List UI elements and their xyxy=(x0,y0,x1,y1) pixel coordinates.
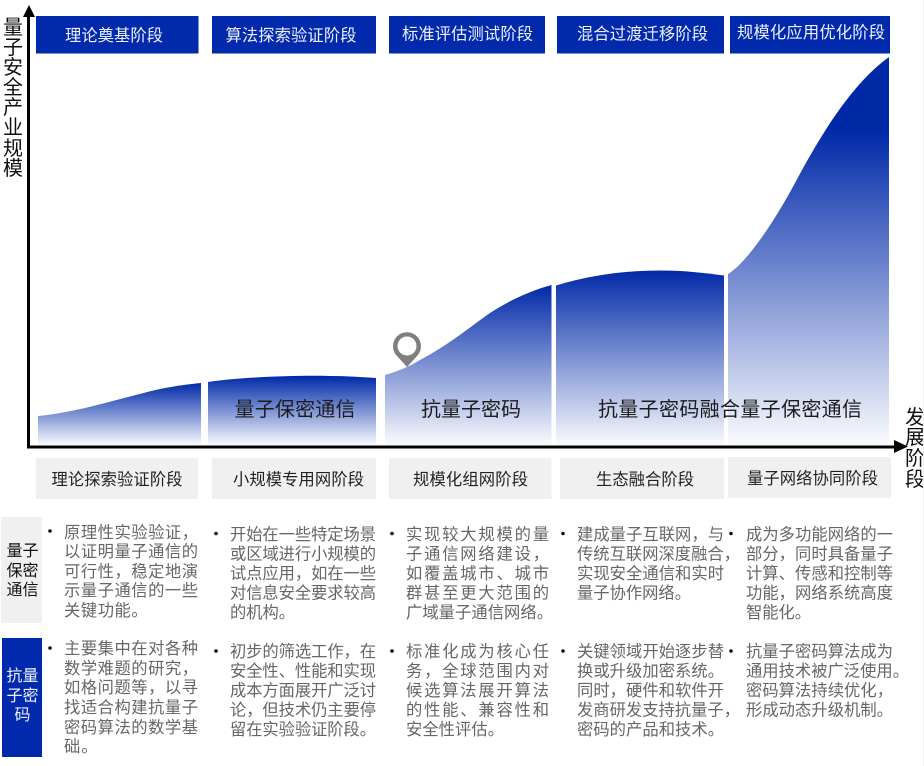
area chart: growth curve xyxy=(38,57,889,445)
chart label: quantum key communication: 量子保密通信 xyxy=(234,398,356,421)
text block: row 1 column 3: 子通信网络建设， xyxy=(406,544,549,564)
text block: row 2 column 1: 数学难题的研究， xyxy=(64,660,198,678)
text block: row 1 column 3: 实现较大规模的量 xyxy=(406,526,549,544)
y axis title: 规 xyxy=(3,137,23,160)
text block: row 1 column 1 xyxy=(48,524,198,620)
text block: row 1 column 5 xyxy=(729,525,893,622)
text block: row 2 column 4: 同时，硬件和软件开 xyxy=(577,682,724,700)
y axis title: 模 xyxy=(3,157,23,180)
y axis title: 产 xyxy=(3,96,23,119)
text block: row 1 column 3: 广域量子通信网络。 xyxy=(406,603,553,622)
text block: row 1 column 3: 如覆盖城市、城市 xyxy=(406,565,549,583)
y axis title: 子 xyxy=(3,37,23,59)
text block: row 1 column 1: 可行性，稳定地演 xyxy=(64,563,198,581)
text block: row 1 column 2: 试点应用，如在一些 xyxy=(230,564,376,583)
stage label 3: 规模化组网阶段 xyxy=(413,471,528,489)
text block: row 2 column 2: 成本方面展开广泛讨 xyxy=(230,682,376,700)
y axis title: 全 xyxy=(3,76,23,99)
stage label 1: 理论探索验证阶段 xyxy=(52,471,182,489)
text block: row 1 column 5: 智能化。 xyxy=(746,604,811,622)
text block: row 2 column 2 xyxy=(214,642,376,739)
chart label: post-quantum cryptography: 抗量子密码 xyxy=(421,398,521,421)
curve segment 2 xyxy=(208,376,376,445)
y axis arrow xyxy=(23,5,35,448)
text block: row 1 column 5: 计算、传感和控制等 xyxy=(746,564,893,583)
y axis title: 安 xyxy=(3,56,23,79)
header 4: 混合过渡迁移阶段 xyxy=(577,26,708,44)
text block: row 1 column 1: 示量子通信的一些 xyxy=(64,582,198,600)
text block: row 2 column 1: 找适合构建抗量子 xyxy=(64,699,198,717)
stage label 2 xyxy=(212,458,376,499)
text block: row 2 column 3: 候选算法展开算法 xyxy=(406,681,549,700)
stage label 5 xyxy=(728,457,891,498)
text block: row 2 column 4: 关键领域开始逐步替 xyxy=(577,643,724,661)
text block: row 1 column 1: 原理性实验验证， xyxy=(64,524,198,542)
text block: row 1 column 5: 部分，同时具备量子 xyxy=(746,546,893,564)
text block: row 1 column 4: 量子协作网络。 xyxy=(577,584,691,602)
text block: row 2 column 4 xyxy=(561,643,740,739)
stage label 1 xyxy=(36,458,198,499)
header 2: 算法探索验证阶段 xyxy=(226,26,356,45)
text block: row 2 column 5: 通用技术被广泛使用。 xyxy=(746,662,909,680)
location pin icon xyxy=(393,332,421,367)
row label: quantum communication: 量子 xyxy=(6,542,39,560)
text block: row 2 column 2: 论，但技术仍主要停 xyxy=(230,702,376,720)
text block: row 1 column 1: 关键功能。 xyxy=(64,602,148,620)
row label: quantum communication xyxy=(1,517,42,623)
text block: row 2 column 5: 形成动态升级机制。 xyxy=(746,702,893,720)
text block: row 2 column 4: 发商研发支持抗量子， xyxy=(577,702,740,720)
stage label 5: 量子网络协同阶段 xyxy=(747,469,878,488)
text block: row 1 column 3 xyxy=(390,526,553,622)
row label: post-quantum cryptography xyxy=(2,638,42,757)
stage label 3 xyxy=(389,458,552,499)
text block: row 1 column 3: 群甚至更大范围的 xyxy=(406,584,549,602)
y axis title: 业 xyxy=(3,116,23,139)
text block: row 1 column 4: 传统互联网深度融合， xyxy=(577,546,740,564)
header 1: 理论奠基阶段 xyxy=(65,27,163,45)
text block: row 1 column 1: 以证明量子通信的 xyxy=(64,543,198,561)
text block: row 1 column 5: 成为多功能网络的一 xyxy=(746,525,893,544)
y axis title xyxy=(3,17,23,180)
text block: row 2 column 3: 务，全球范围内对 xyxy=(406,662,549,680)
header 1 xyxy=(36,16,198,54)
text block: row 2 column 4: 密码的产品和技术。 xyxy=(577,721,724,739)
row label: post-quantum cryptography: 码 xyxy=(14,706,31,724)
stage label 4 xyxy=(560,458,724,499)
text block: row 1 column 4: 实现安全通信和实时 xyxy=(577,565,724,583)
header 2 xyxy=(212,16,376,54)
stage label 2: 小规模专用网阶段 xyxy=(233,471,364,489)
bottom stage labels: quantum communication xyxy=(36,457,891,499)
text block: row 1 column 2: 开始在一些特定场景 xyxy=(230,526,376,544)
text block: row 2 column 3 xyxy=(390,643,549,739)
text block: row 1 column 4 xyxy=(561,526,740,602)
row label: post-quantum cryptography: 子密 xyxy=(6,687,39,705)
curve segment 1 xyxy=(38,383,201,445)
text block: row 2 column 1: 如格问题等，以寻 xyxy=(64,679,198,697)
text block: row 2 column 2: 安全性、性能和实现 xyxy=(230,662,376,680)
text block: row 2 column 5: 抗量子密码算法成为 xyxy=(746,642,893,661)
text block: row 2 column 1: 密码算法的数学基 xyxy=(64,718,198,737)
text block: row 2 column 1: 主要集中在对各种 xyxy=(64,640,198,658)
text block: row 1 column 2 xyxy=(214,526,376,622)
x axis title xyxy=(905,406,924,491)
text block: row 2 column 5 xyxy=(729,642,909,720)
header 5: 规模化应用优化阶段 xyxy=(737,23,885,42)
text block: row 2 column 4: 换或升级加密系统。 xyxy=(577,662,724,680)
text block: row 1 column 5: 功能，网络系统高度 xyxy=(746,584,893,602)
curve segment 5 xyxy=(728,57,889,445)
row label: quantum communication: 保密 xyxy=(6,562,39,580)
text block: row 2 column 3: 安全性评估。 xyxy=(406,721,504,739)
chart label: combined: 抗量子密码融合量子保密通信 xyxy=(598,398,862,421)
text block: row 2 column 3: 的性能、兼容性和 xyxy=(406,702,549,720)
text block: row 2 column 2: 初步的筛选工作，在 xyxy=(230,642,376,661)
text block: row 2 column 2: 留在实验验证阶段。 xyxy=(230,721,376,739)
header 3 xyxy=(389,16,545,54)
y axis title: 量 xyxy=(3,17,23,39)
curve segment 4 xyxy=(556,270,724,445)
row label: quantum communication: 通信 xyxy=(6,581,39,599)
text block: row 1 column 2: 或区域进行小规模的 xyxy=(230,546,376,564)
x axis arrow xyxy=(27,440,908,453)
header 4 xyxy=(557,16,724,54)
curve segment 3 xyxy=(385,285,552,445)
text block: row 2 column 5: 密码算法持续优化， xyxy=(746,681,893,700)
text block: row 2 column 1: 础。 xyxy=(64,738,98,756)
row label: post-quantum cryptography: 抗量 xyxy=(6,667,39,685)
top stage headers: quantum-safe cryptography xyxy=(36,16,890,54)
header 5 xyxy=(730,16,890,54)
text block: row 2 column 1 xyxy=(48,640,198,756)
stage label 4: 生态融合阶段 xyxy=(596,471,694,489)
text block: row 1 column 2: 对信息安全要求较高 xyxy=(230,584,376,602)
text block: row 1 column 2: 的机构。 xyxy=(230,604,295,622)
text block: row 1 column 4: 建成量子互联网，与 xyxy=(577,526,724,544)
header 3: 标准评估测试阶段 xyxy=(402,26,533,44)
text block: row 2 column 3: 标准化成为核心任 xyxy=(406,643,549,661)
